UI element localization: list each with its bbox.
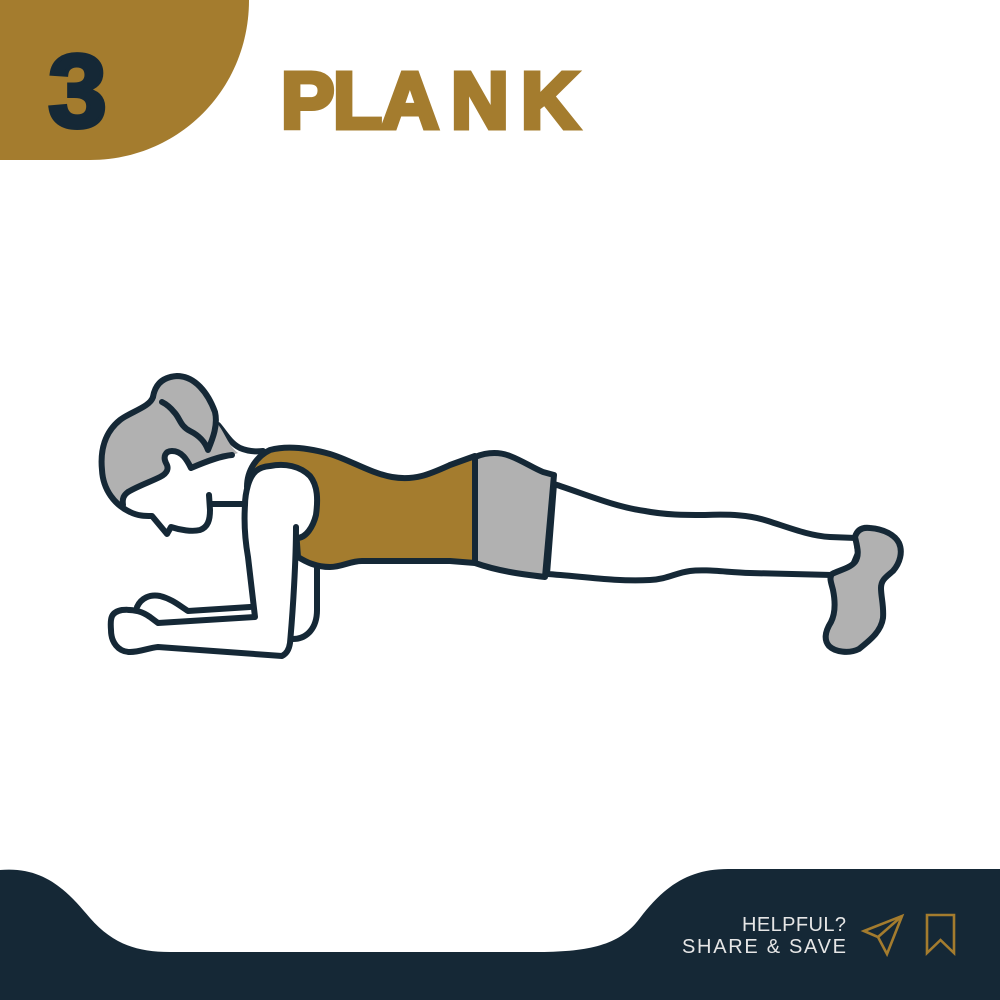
header number badge	[0, 0, 249, 160]
neck line	[212, 501, 245, 507]
shorts	[475, 453, 554, 577]
hair	[102, 376, 238, 508]
shoe	[826, 528, 901, 652]
title: PLANK	[281, 56, 579, 145]
plank figure illustration	[102, 376, 901, 656]
front arm	[111, 465, 317, 656]
footer call to action	[682, 914, 846, 958]
icon: bookmark	[927, 915, 954, 953]
footer call to action: SHARE & SAVE	[682, 936, 846, 958]
icon: paper plane	[864, 916, 902, 954]
header number badge: 3	[48, 34, 107, 150]
far hand and forearm	[137, 595, 250, 611]
back arm	[293, 565, 317, 639]
tank top	[247, 448, 475, 567]
face and ear	[123, 451, 232, 505]
footer band	[0, 869, 1000, 1000]
footer call to action: HELPFUL?	[742, 914, 846, 936]
far leg	[547, 484, 858, 580]
neck	[218, 425, 263, 451]
